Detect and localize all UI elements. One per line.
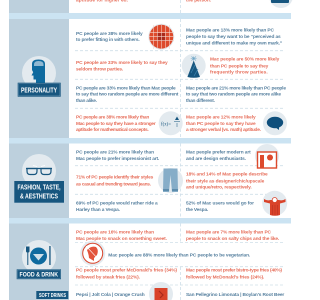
icon: framed art [255, 144, 279, 168]
text: Mac random people: than different. [186, 98, 215, 104]
text: PC fries: followed by steak fries (22%). [76, 274, 140, 280]
text: Mac Vespa: the Vespa. [186, 207, 208, 213]
text: fitting in PC: PC people are 38% more likely [76, 31, 143, 37]
icon: previous section badge [269, 0, 293, 8]
icon: fork [26, 246, 30, 265]
text: Mac modern art: Mac people prefer modern art [186, 149, 251, 155]
heading: personality: PERSONALITY [21, 88, 57, 95]
text: Mac fries [186, 268, 282, 280]
text: Mac modern art [186, 149, 251, 162]
text: Mac salty snacks: Mac people are 7% more likely than PC [186, 229, 272, 235]
text: fitting in PC: to prefer fitting in with others. [76, 37, 140, 43]
cap of brain [34, 61, 44, 66]
text: Mac Vespa: 52% of Mac users would go for [186, 201, 254, 207]
text: PC Harley [76, 201, 158, 213]
text: PC fries [76, 268, 177, 280]
text: Mac soft drinks: San Pellegrino Limonata | Boylan's Root Beer [186, 292, 284, 298]
text: Mac verbal aptitude: than PC people to say they have [186, 121, 256, 127]
text: PC parties: PC people are 33% more likely to say they [76, 60, 168, 66]
text: PC random people: to say that two random people are more different [76, 92, 179, 98]
text: PC impressionist art: Mac people to prefer impressionist art. [76, 156, 159, 162]
text: PC parties [76, 60, 168, 72]
text: Mac style [186, 172, 268, 191]
text: vegetarian: Mac people are 88% more likely than PC people to be vegetarian. [108, 252, 250, 258]
text: PC impressionist art [76, 149, 159, 162]
text: PC soft drinks: Pepsi | Jolt Cola | Orange Crush [76, 292, 145, 298]
text: PC random people [76, 85, 179, 104]
icon: party hat [182, 54, 206, 78]
text: PC Harley: 69% of PC people would rather ride a [76, 201, 158, 207]
text: Mac Vespa [186, 201, 254, 213]
text: Mac salty snacks [186, 229, 279, 242]
text: Mac parties: than PC people to say they [210, 63, 269, 69]
text: Mac style: 18% and 14% of Mac people describe [186, 172, 268, 178]
text: Mac parties: frequently throw parties. [210, 70, 268, 76]
panel: left sidebar [9, 0, 69, 300]
text: PC math aptitude: aptitude for mathematical concepts. [76, 127, 149, 133]
text: PC sweet snacks: Mac people to snack on something sweet. [76, 236, 167, 242]
text: Mac random people [186, 85, 286, 104]
icon: head [32, 60, 45, 83]
icon: math formula [159, 111, 183, 135]
text: perceived as unique [186, 28, 283, 46]
text: Mac style: and unique/retro, respectively. [186, 185, 252, 191]
section band 2 [9, 138, 291, 144]
text: Mac parties: Mac people are 50% more likely [210, 57, 280, 63]
text: PC parties: seldom throw parties. [76, 66, 123, 72]
heading: fashion, taste and aesthetics [14, 154, 64, 203]
text: Mac fries: Mac people most prefer bistro-type fries (40%) [186, 268, 282, 274]
icon: glasses [26, 166, 52, 174]
text: Mac modern art: and are design enthusiasts. [186, 156, 246, 162]
previous section text fragments [76, 0, 211, 3]
icon: knife [49, 246, 51, 265]
icon: vespa [262, 191, 287, 216]
text: Mac verbal aptitude: Mac people are 12% more likely [186, 115, 256, 121]
heading: soft drinks [36, 291, 68, 299]
text: PC math aptitude: Mac people to say they have a stronger [76, 121, 156, 127]
heading: fashion, taste and aesthetics: FASHION, TASTE, [18, 184, 61, 192]
text: Mac verbal aptitude [186, 115, 261, 133]
text: PC jeans [76, 175, 154, 187]
text: PC fries: PC people most prefer McDonald's fries (34%) [76, 268, 177, 274]
text: PC sweet snacks [76, 229, 167, 242]
text: PC Harley: Harley than a Vespa. [76, 207, 120, 213]
icon: plate [30, 248, 47, 264]
section band 3 [9, 218, 291, 224]
icon: jeans [158, 168, 183, 193]
text: PC sweet snacks: PC people are 16% more likely than [76, 229, 154, 235]
text: Mac style: their style as designer/chic/upscale [186, 178, 265, 184]
text: Mac salty snacks: people to snack on salty chips and the like. [186, 236, 279, 242]
section band 1 [9, 13, 291, 19]
text: PC jeans: 71% of PC people identify their styles [76, 175, 154, 181]
text: PC random people: PC people are 33% more likely than Mac people [76, 85, 176, 91]
heading: food and drink: FOOD & DRINK [20, 273, 59, 279]
heading: soft drinks: SOFT DRINKS [39, 293, 66, 299]
heading: fashion, taste and aesthetics: & AESTHETICS [20, 194, 58, 201]
text: PC impressionist art: PC people are 21% more likely than [76, 149, 154, 155]
heading: food and drink [17, 240, 61, 279]
text: Mac random people: Mac people are 21% more likely than PC people [186, 85, 286, 91]
text: Mac fries: followed by McDonald's fries (24%). [186, 274, 264, 280]
icon: grid circle [148, 24, 174, 50]
icon: speech bubble [263, 111, 287, 135]
icon: no meat [80, 241, 105, 266]
text: PC jeans: as casual and trending toward jeans. [76, 181, 151, 187]
text: PC math aptitude [76, 115, 156, 133]
text: PC math aptitude: PC people are 38% more likely than [76, 115, 149, 121]
heading: personality [18, 56, 61, 97]
text: perceived as unique: people to say they want to be “perceived as [186, 34, 281, 40]
text: Mac verbal aptitude: a stronger verbal (vs. math) aptitude. [186, 127, 261, 133]
text: Mac parties [210, 57, 280, 76]
text: Mac random people: to say that two random people are more alike [186, 92, 281, 98]
text: perceived as unique: Mac people are 13% more likely than PC [186, 28, 275, 34]
icon: math formula: f(x)= [161, 122, 171, 127]
icon: soda can [149, 282, 173, 300]
text: perceived as unique: unique and different to make my own mark.” [186, 40, 283, 46]
text: PC random people: than alike. [76, 98, 97, 104]
text: fitting in PC [76, 31, 143, 43]
